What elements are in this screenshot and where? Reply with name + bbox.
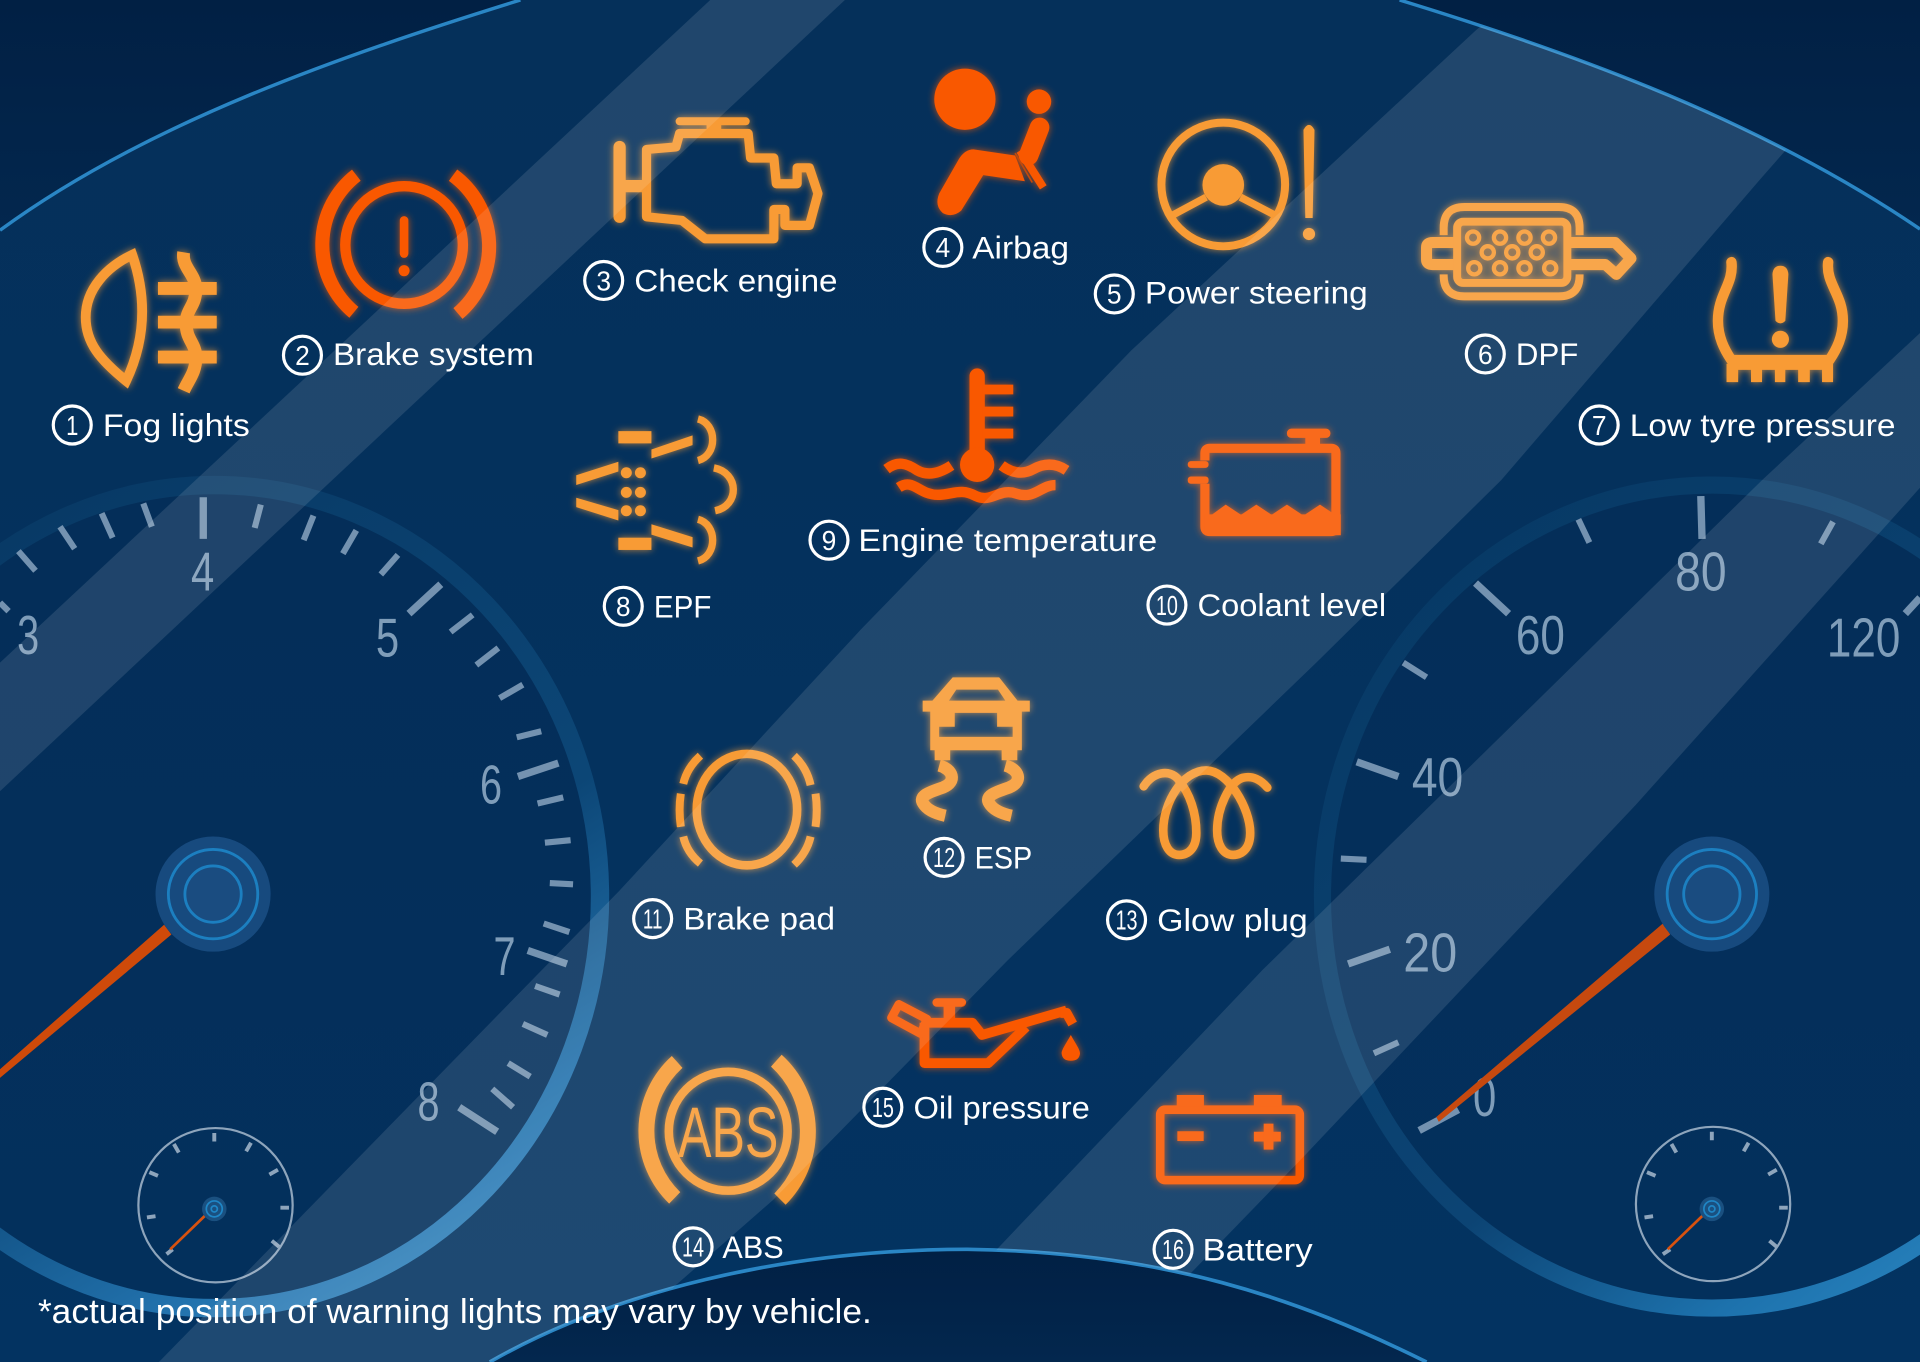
speedometer numbers: 120 [1827, 606, 1900, 669]
label: power steering: Power steering [1145, 275, 1368, 311]
item 11: brake pad [634, 754, 835, 938]
label: coolant level: Coolant level [1198, 587, 1386, 623]
item 5: power steering [1095, 123, 1368, 313]
item 9: engine temperature [810, 376, 1157, 559]
label: brake pad: 11 [643, 903, 662, 934]
label: battery: Battery [1202, 1231, 1313, 1267]
icon: coolant level [1188, 429, 1341, 535]
rev counter numbers: 6 [480, 753, 502, 815]
icon: oil pressure [891, 998, 1080, 1063]
label: oil pressure: 15 [872, 1092, 894, 1123]
label: glow plug: 13 [1116, 905, 1138, 936]
speedometer numbers: 0 [1473, 1066, 1496, 1128]
rev counter numbers: 4 [191, 540, 214, 602]
item 15: oil pressure [864, 998, 1090, 1126]
item 13: glow plug [1108, 770, 1308, 939]
icon: EPF [576, 419, 733, 561]
rev counter numbers: 8 [418, 1071, 440, 1133]
label: ESP [925, 838, 1032, 876]
item 7: low tyre pressure [1580, 262, 1896, 444]
label: fog lights: 1 [66, 410, 78, 441]
label: check engine: 3 [596, 265, 611, 296]
label: brake system: 2 [295, 340, 310, 371]
label: ESP: 12 [933, 842, 955, 873]
icon: glow plug [1144, 770, 1267, 855]
rev counter ticks [0, 497, 573, 1132]
rev counter hub [156, 837, 271, 952]
label: brake pad: Brake pad [683, 901, 835, 937]
rev counter numbers: 7 [493, 925, 516, 987]
icon: brake pad [680, 754, 817, 865]
label: EPF: 8 [616, 591, 631, 622]
label: ABS: ABS [722, 1229, 784, 1265]
item 14: ABS [646, 1061, 808, 1266]
speedometer numbers: 80 [1675, 540, 1727, 602]
icon: DPF filter [1427, 207, 1631, 296]
small dial, left [138, 1128, 293, 1282]
item 10: coolant level [1148, 429, 1386, 624]
item 16: battery [1154, 1095, 1313, 1268]
label: DPF [1466, 335, 1578, 373]
item 1: fog lights [53, 252, 250, 444]
item 12: ESP [922, 677, 1032, 876]
icon: ESP car skidding [922, 677, 1030, 816]
right gauge: speedometer [1322, 485, 1920, 1308]
label: EPF: EPF [654, 588, 711, 624]
label: airbag: Airbag [972, 229, 1069, 265]
icon: airbag [934, 69, 1051, 215]
icon: fog lights [86, 252, 217, 391]
rev counter needle [0, 925, 171, 1078]
label: low tyre pressure: Low tyre pressure [1630, 407, 1896, 443]
label: power steering: 5 [1107, 279, 1122, 310]
icon: check engine [620, 121, 818, 239]
footnote: *actual position of warning lights may vary by vehicle. [38, 1293, 872, 1331]
icon: battery [1160, 1095, 1300, 1180]
rev counter numbers: 5 [376, 606, 399, 669]
label: coolant level: 10 [1156, 590, 1178, 621]
speedometer numbers [1403, 540, 1900, 1128]
icon: brake system [322, 175, 489, 314]
item 2: brake system [283, 175, 534, 374]
speedometer numbers: 20 [1403, 921, 1457, 983]
label: glow plug [1108, 901, 1308, 939]
item 6: DPF [1427, 207, 1631, 373]
label: brake pad [634, 900, 835, 938]
label: brake system: Brake system [333, 336, 534, 372]
speedometer numbers: 60 [1516, 604, 1565, 666]
label: battery [1154, 1230, 1313, 1268]
icon: ABS: ABS [678, 1094, 778, 1173]
label: airbag [924, 228, 1069, 266]
label: low tyre pressure: 7 [1592, 410, 1607, 441]
speedometer ticks [1341, 496, 1920, 1131]
item 8: EPF [576, 419, 733, 625]
label: engine temperature: Engine temperature [858, 522, 1157, 558]
label: DPF: 6 [1478, 339, 1493, 370]
label: glow plug: Glow plug [1157, 902, 1308, 938]
speedometer numbers: 40 [1412, 746, 1463, 808]
left gauge: rev counter [0, 485, 600, 1308]
label: DPF: DPF [1516, 336, 1578, 372]
label: check engine: Check engine [634, 263, 838, 299]
speedometer hub [1654, 837, 1769, 952]
icon: engine temperature [887, 376, 1067, 498]
icon: low tyre pressure [1718, 262, 1843, 382]
item 3: check engine [585, 121, 838, 299]
label: fog lights [53, 406, 250, 444]
label: fog lights: Fog lights [103, 407, 250, 443]
rev counter numbers [17, 540, 516, 1133]
item 4: airbag [924, 69, 1069, 266]
icon: power steering [1161, 123, 1315, 246]
label: battery: 16 [1162, 1234, 1184, 1265]
icon: ABS [646, 1061, 808, 1199]
label: ABS: 14 [682, 1232, 704, 1263]
label: engine temperature: 9 [822, 525, 836, 556]
label: oil pressure: Oil pressure [913, 1089, 1090, 1125]
rev counter numbers: 3 [17, 604, 39, 666]
small dial, right [1636, 1127, 1790, 1281]
label: ESP: ESP [975, 839, 1032, 875]
speedometer needle [1436, 924, 1670, 1122]
label: EPF [604, 587, 711, 625]
label: ABS [674, 1228, 784, 1266]
label: airbag: 4 [936, 232, 950, 263]
